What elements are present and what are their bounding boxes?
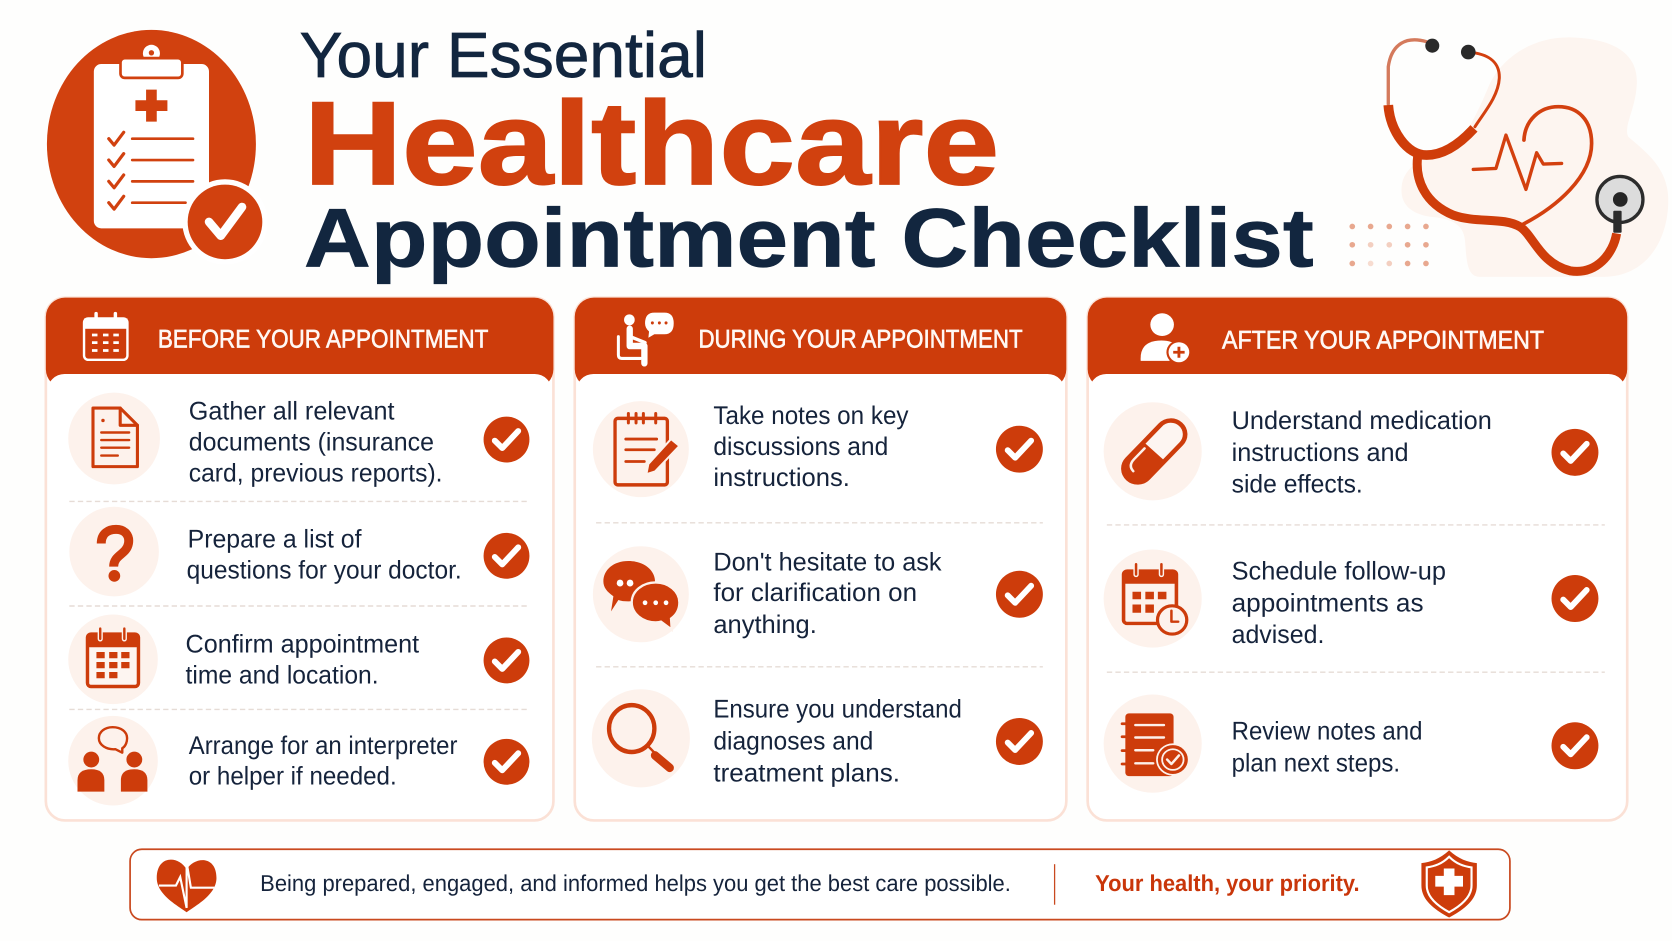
panel: before your appointment	[46, 298, 553, 820]
icon: shield with cross	[1421, 850, 1477, 918]
footer banner	[130, 849, 1510, 920]
text: follow-up	[1232, 557, 1446, 649]
text: take notes	[713, 402, 909, 493]
text: medication: side effects.	[1232, 470, 1363, 499]
text: arrange interpreter: or helper if needed.	[189, 762, 397, 791]
icon: notepad with pencil	[593, 401, 689, 497]
text: confirm appointment	[186, 630, 419, 690]
text: follow-up: Schedule follow-up	[1232, 557, 1446, 586]
title: Appointment Checklist	[304, 191, 1314, 285]
text: take notes: instructions.	[713, 464, 850, 493]
check	[1552, 575, 1598, 622]
text: ask for clarification: Don't hesitate to ask	[713, 548, 943, 577]
icon: document	[68, 393, 160, 484]
footer tagline: Your health, your priority.	[1095, 871, 1360, 896]
check	[484, 637, 529, 683]
icon: calendar with clock	[1104, 549, 1202, 648]
icon: calendar	[68, 615, 158, 704]
text: take notes: discussions and	[713, 433, 888, 461]
text: ask for clarification	[713, 548, 943, 640]
text: confirm appointment: Confirm appointment	[186, 630, 419, 659]
check	[1552, 722, 1598, 769]
icon: notebook with check	[1104, 695, 1202, 793]
icon: two people talking	[68, 716, 158, 806]
icon: pill capsule	[1104, 402, 1202, 500]
icon: question mark	[69, 507, 159, 596]
text: ensure understanding: treatment plans.	[713, 759, 900, 788]
text: arrange interpreter: Arrange for an interpreter	[189, 731, 457, 760]
check	[996, 426, 1043, 473]
check	[1552, 429, 1598, 476]
icon: magnifying glass	[592, 689, 690, 787]
check	[996, 718, 1043, 765]
heading: DURING YOUR APPOINTMENT	[698, 325, 1023, 354]
text: prepare questions	[187, 525, 462, 585]
text: review notes	[1232, 717, 1422, 778]
check	[996, 571, 1043, 618]
text: gather documents	[189, 397, 443, 488]
panel: after your appointment	[1088, 298, 1627, 820]
text: gather documents: Gather all relevant	[189, 397, 395, 426]
text: ask for clarification: anything.	[713, 611, 817, 640]
icon: person with plus	[1141, 313, 1191, 364]
check	[484, 739, 529, 785]
text: prepare questions: Prepare a list of	[188, 525, 362, 554]
icon: chat bubbles	[593, 546, 689, 642]
text: prepare questions: questions for your doctor.	[187, 556, 462, 585]
text: review notes: Review notes and	[1232, 717, 1422, 746]
check	[484, 533, 529, 579]
illustration: stethoscope with heart	[1349, 37, 1668, 277]
text: follow-up: appointments as	[1232, 589, 1424, 618]
text: confirm appointment: time and location.	[186, 661, 379, 690]
text: ensure understanding: diagnoses and	[713, 727, 873, 756]
check	[484, 417, 529, 462]
title	[300, 19, 1314, 285]
icon: heart with pulse	[157, 860, 216, 912]
text: follow-up: advised.	[1232, 620, 1324, 649]
text: medication: Understand medication	[1232, 407, 1492, 436]
heading: BEFORE YOUR APPOINTMENT	[158, 325, 489, 354]
text: ensure understanding	[713, 695, 962, 788]
text: medication	[1232, 407, 1492, 499]
text: review notes: plan next steps.	[1232, 749, 1400, 778]
text: gather documents: card, previous reports).	[189, 459, 443, 488]
footer message: Being prepared, engaged, and informed helps you get the best care possible.	[260, 871, 1011, 896]
icon: clipboard with check badge	[47, 30, 268, 265]
text: ensure understanding: Ensure you understand	[713, 695, 962, 724]
text: arrange interpreter	[189, 731, 457, 791]
text: take notes: Take notes on key	[713, 402, 909, 430]
icon: patient with speech bubble	[618, 313, 674, 363]
text: gather documents: documents (insurance	[189, 428, 434, 457]
text: medication: instructions and	[1232, 439, 1409, 468]
title: Your Essential	[300, 19, 707, 91]
panel: during your appointment	[575, 298, 1066, 820]
title: Healthcare	[304, 77, 999, 210]
icon: calendar header	[84, 314, 127, 360]
heading: AFTER YOUR APPOINTMENT	[1222, 326, 1544, 355]
text: ask for clarification: for clarification on	[713, 579, 917, 608]
